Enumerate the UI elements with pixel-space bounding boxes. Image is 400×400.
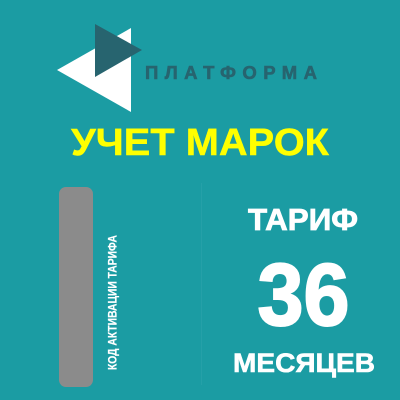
icon: dark triangle [95, 24, 142, 77]
tariff duration unit: МЕСЯЦЕВ [233, 348, 375, 378]
tariff heading: ТАРИФ [248, 202, 358, 237]
logo: platforma [57, 24, 317, 112]
tariff duration number: 36 [258, 245, 350, 344]
activation code label: КОД АКТИВАЦИИ ТАРИФА [108, 235, 120, 370]
brand name: ПЛАТФОРМА [145, 62, 317, 83]
activation code panel [59, 187, 93, 387]
title: УЧЕТ МАРОК [71, 122, 330, 164]
icon: white triangle [57, 28, 131, 112]
